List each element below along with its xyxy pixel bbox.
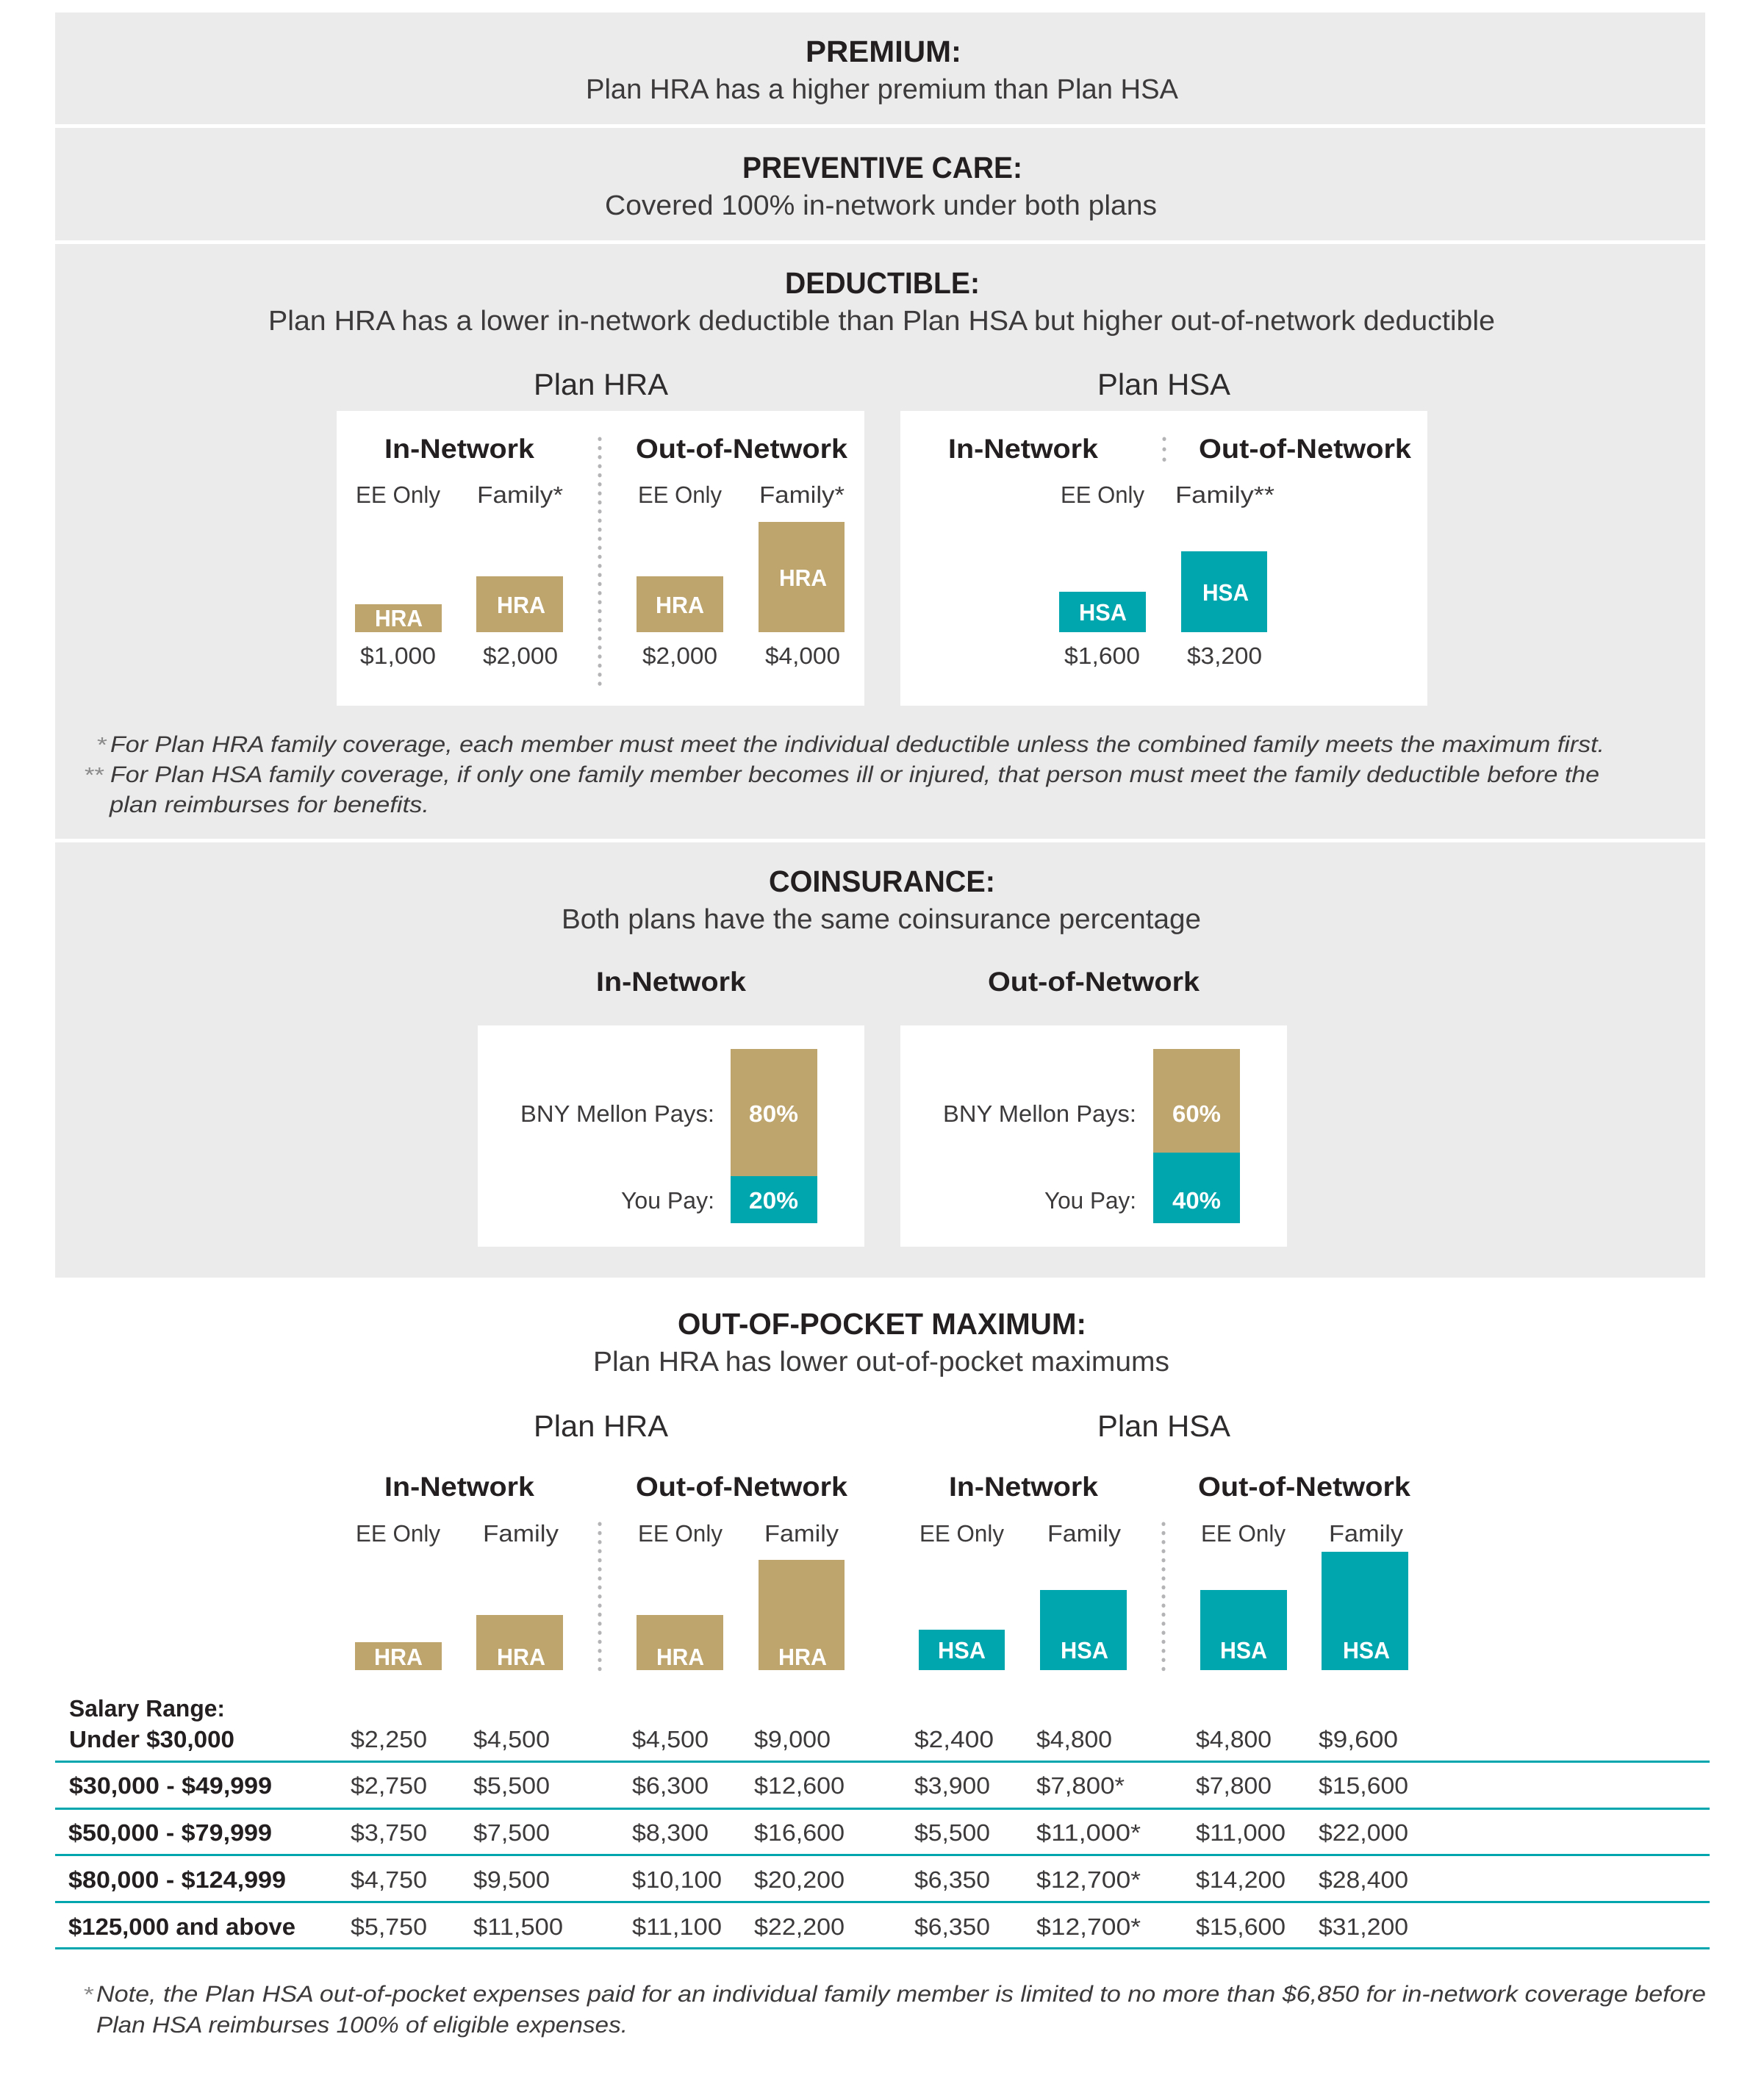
row: $125,000 and above: $11,500: [473, 1913, 563, 1940]
footnote: out-of-pocket: [84, 1981, 1706, 2038]
panel: deductible: [55, 244, 1705, 839]
bar: out-of-network EE only: HSA: [1220, 1637, 1267, 1664]
footnotes: deductible: [85, 731, 1605, 817]
subheading: in-network: In-Network: [948, 434, 1098, 464]
bar: in-network EE only: HRA: [374, 1644, 423, 1670]
bar: in-network family: $2,000: [483, 642, 558, 669]
bar: in-network EE only: HRA: [375, 605, 423, 631]
card: out-of-network coinsurance bar: BNY Mellon Pays:: [943, 1100, 1136, 1127]
row: under $30,000: $9,000: [754, 1726, 831, 1752]
row: $50,000 - $79,999: $22,000: [1319, 1819, 1408, 1846]
bar: out-of-network EE only: EE Only: [1201, 1520, 1286, 1547]
row: $80,000 - $124,999: $14,200: [1196, 1866, 1286, 1893]
row: $30,000 - $49,999: $3,900: [914, 1772, 990, 1799]
subheading: out-of-network: Out-of-Network: [988, 967, 1200, 997]
row: $80,000 - $124,999: $20,200: [754, 1866, 845, 1893]
bar: out-of-network family: HSA: [1343, 1637, 1390, 1664]
row: $80,000 - $124,999: $9,500: [473, 1866, 550, 1893]
bar: out-of-network family: Family*: [759, 481, 845, 508]
footnote: out-of-pocket: *: [84, 1983, 94, 2007]
row: under $30,000: $4,500: [632, 1726, 709, 1752]
bar: in-network EE only: [919, 1520, 1005, 1670]
row: $50,000 - $79,999: $16,600: [754, 1819, 845, 1846]
subheading: in-network: In-Network: [384, 434, 534, 464]
subheading: out-of-network: Out-of-Network: [636, 434, 847, 464]
bar: in-network EE only: [355, 1520, 442, 1670]
bar: out-of-network family: Family: [1329, 1520, 1403, 1547]
bar: in-network family: HRA: [497, 592, 545, 618]
row: $50,000 - $79,999: [68, 1819, 1408, 1846]
footnotes: deductible: For Plan HSA family coverage, if only one family member becomes ill or injured, that person must meet the family deductible before the: [110, 762, 1599, 787]
bar: out-of-network family: HRA: [778, 1644, 827, 1670]
row: $30,000 - $49,999: [69, 1772, 1408, 1799]
panel: coinsurance: [55, 842, 1705, 1278]
bar: in-network family: [476, 1520, 563, 1670]
bar: out-of-network family: $4,000: [765, 642, 840, 669]
row: $30,000 - $49,999: $6,300: [632, 1772, 709, 1799]
subheading: out-of-network: Out-of-Network: [1199, 434, 1411, 464]
heading: premium: PREMIUM:: [806, 35, 961, 68]
footnote: out-of-pocket: Plan HSA reimburses 100% of eligible expenses.: [96, 2012, 628, 2038]
row: $125,000 and above: $125,000 and above: [68, 1913, 295, 1940]
bar: out-of-network family: HRA: [779, 565, 827, 591]
row: $30,000 - $49,999: $7,800: [1196, 1772, 1272, 1799]
subheading: in-network: In-Network: [384, 1472, 534, 1502]
bar: out-of-network EE only: EE Only: [638, 481, 722, 508]
bar: in-network family: Family*: [477, 481, 563, 508]
row: $50,000 - $79,999: $7,500: [473, 1819, 550, 1846]
row: $125,000 and above: $15,600: [1196, 1913, 1286, 1940]
row: $80,000 - $124,999: [68, 1866, 1408, 1893]
card: in-network coinsurance bar: 80%: [749, 1100, 798, 1127]
bar: out-of-network EE only: [637, 1520, 723, 1670]
subheading: in-network: In-Network: [596, 967, 746, 997]
bar: out-of-network family: [1322, 1520, 1408, 1670]
row: $30,000 - $49,999: $2,750: [351, 1772, 427, 1799]
subheading: in-network: In-Network: [949, 1472, 1098, 1502]
bar: out-of-network family: Family: [764, 1520, 839, 1547]
label: salary range: Salary Range:: [69, 1695, 225, 1722]
bar: out-of-network family: [759, 1520, 845, 1670]
row: $80,000 - $124,999: $12,700*: [1036, 1866, 1141, 1893]
panel: premium: [55, 12, 1705, 124]
subheading: out-of-network: Out-of-Network: [636, 1472, 847, 1502]
row: under $30,000: $4,800: [1036, 1726, 1112, 1752]
text: premium summary: Plan HRA has a higher premium than Plan HSA: [586, 74, 1179, 105]
section: out-of-pocket maximum: [55, 1307, 1710, 2038]
row: $50,000 - $79,999: $3,750: [351, 1819, 427, 1846]
bar: in-network family: Family: [483, 1520, 559, 1547]
card: in-network coinsurance bar: [478, 1025, 864, 1247]
text: coinsurance summary: Both plans have the same coinsurance percentage: [562, 904, 1201, 935]
heading: out-of-pocket maximum: OUT-OF-POCKET MAXIMUM:: [678, 1307, 1086, 1341]
heading: plan HSA: Plan HSA: [1097, 368, 1231, 401]
row: under $30,000: $4,500: [473, 1726, 550, 1752]
bar: family: Family**: [1175, 481, 1274, 508]
bar: in-network family: [476, 481, 563, 669]
heading: coinsurance: COINSURANCE:: [769, 864, 995, 898]
bar: in-network EE only: HSA: [938, 1637, 986, 1664]
row: $50,000 - $79,999: $8,300: [632, 1819, 709, 1846]
card: in-network coinsurance bar: BNY Mellon Pays:: [520, 1100, 714, 1127]
bar: in-network family: [1040, 1520, 1127, 1670]
card: out-of-network coinsurance bar: 60%: [1172, 1100, 1221, 1127]
heading: plan HSA: Plan HSA: [1097, 1409, 1231, 1443]
footnote: out-of-pocket: Note, the Plan HSA out-of-pocket expenses paid for an individual family member is limited to no more than $6,850 for in-network coverage before: [96, 1981, 1706, 2007]
row: $30,000 - $49,999: $5,500: [473, 1772, 550, 1799]
row: under $30,000: $2,250: [351, 1726, 427, 1752]
bar: in-network EE only: EE Only: [356, 1520, 440, 1547]
bar: family: HSA: [1202, 579, 1249, 606]
bar: out-of-network family: [759, 481, 845, 669]
bar: out-of-network EE only: $2,000: [642, 642, 717, 669]
row: under $30,000: $9,600: [1319, 1726, 1398, 1752]
card: plan HSA deductible chart: [900, 411, 1427, 706]
bar: out-of-network EE only: EE Only: [638, 1520, 723, 1547]
text: preventive care summary: Covered 100% in-network under both plans: [605, 190, 1157, 221]
heading: plan HRA: Plan HRA: [534, 368, 669, 401]
bar: EE only: EE Only: [1061, 481, 1144, 508]
row: $50,000 - $79,999: $50,000 - $79,999: [68, 1819, 272, 1846]
bar: family: [1175, 481, 1274, 669]
row: $80,000 - $124,999: $6,350: [914, 1866, 990, 1893]
row: $125,000 and above: $22,200: [754, 1913, 845, 1940]
chart: plan HRA out-of-pocket bars: [355, 1472, 847, 1670]
bar: in-network family: HSA: [1061, 1637, 1108, 1664]
chart: plan HSA out-of-pocket bars: [919, 1472, 1410, 1670]
bar: in-network family: HRA: [497, 1644, 545, 1670]
row: $125,000 and above: $31,200: [1319, 1913, 1408, 1940]
row: $30,000 - $49,999: $7,800*: [1036, 1772, 1125, 1799]
bar: in-network EE only: EE Only: [919, 1520, 1004, 1547]
row: under $30,000: [69, 1726, 1398, 1752]
row: $30,000 - $49,999: $12,600: [754, 1772, 845, 1799]
card: plan HRA deductible chart: [337, 411, 864, 706]
bar: out-of-network EE only: [637, 481, 723, 669]
row: $125,000 and above: $12,700*: [1036, 1913, 1141, 1940]
card: out-of-network coinsurance bar: [900, 1025, 1287, 1247]
bar: EE only: HSA: [1079, 599, 1127, 626]
card: in-network coinsurance bar: You Pay:: [621, 1187, 714, 1214]
bar: in-network EE only: [355, 481, 442, 669]
bar: in-network family: Family: [1047, 1520, 1121, 1547]
bar: out-of-network EE only: HRA: [656, 592, 704, 618]
row: $30,000 - $49,999: $15,600: [1319, 1772, 1408, 1799]
row: $50,000 - $79,999: $5,500: [914, 1819, 990, 1846]
footnotes: deductible: *: [97, 734, 107, 757]
row: $125,000 and above: $5,750: [351, 1913, 427, 1940]
row: under $30,000: $4,800: [1196, 1726, 1272, 1752]
bar: family: $3,200: [1187, 642, 1262, 669]
card: out-of-network coinsurance bar: You Pay:: [1044, 1187, 1136, 1214]
text: out-of-pocket summary: Plan HRA has lower out-of-pocket maximums: [593, 1347, 1169, 1378]
footnotes: deductible: plan reimburses for benefits.: [109, 792, 429, 817]
row: $80,000 - $124,999: $28,400: [1319, 1866, 1408, 1893]
row: $80,000 - $124,999: $4,750: [351, 1866, 427, 1893]
heading: plan HRA: Plan HRA: [534, 1409, 669, 1443]
row: under $30,000: $2,400: [914, 1726, 994, 1752]
bar: out-of-network EE only: HRA: [656, 1644, 704, 1670]
bar: EE only: $1,600: [1064, 642, 1140, 669]
row: $80,000 - $124,999: $80,000 - $124,999: [68, 1866, 286, 1893]
heading: preventive care: PREVENTIVE CARE:: [742, 151, 1022, 185]
bar: EE only: [1059, 481, 1146, 669]
bar: in-network EE only: EE Only: [356, 481, 440, 508]
row: $80,000 - $124,999: $10,100: [632, 1866, 722, 1893]
panel: preventive care: [55, 128, 1705, 240]
row: $50,000 - $79,999: $11,000: [1196, 1819, 1286, 1846]
footnotes: deductible: **: [85, 764, 104, 787]
heading: deductible: DEDUCTIBLE:: [785, 266, 980, 300]
card: out-of-network coinsurance bar: 40%: [1172, 1187, 1221, 1214]
footnotes: deductible: For Plan HRA family coverage, each member must meet the individual deductible unless the combined family meets the maximum first.: [110, 731, 1605, 757]
row: $125,000 and above: $6,350: [914, 1913, 990, 1940]
subheading: out-of-network: Out-of-Network: [1198, 1472, 1410, 1502]
text: deductible summary: Plan HRA has a lower in-network deductible than Plan HSA but higher out-of-network deductible: [268, 306, 1495, 337]
row: $125,000 and above: $11,100: [632, 1913, 722, 1940]
row: $50,000 - $79,999: $11,000*: [1036, 1819, 1141, 1846]
bar: in-network EE only: $1,000: [360, 642, 436, 669]
card: in-network coinsurance bar: 20%: [749, 1187, 798, 1214]
table: out-of-pocket maximums by salary range: [55, 1695, 1710, 1949]
row: under $30,000: Under $30,000: [69, 1726, 234, 1752]
row: $30,000 - $49,999: $30,000 - $49,999: [69, 1772, 272, 1799]
row: $125,000 and above: [68, 1913, 1408, 1940]
bar: out-of-network EE only: [1200, 1520, 1287, 1670]
